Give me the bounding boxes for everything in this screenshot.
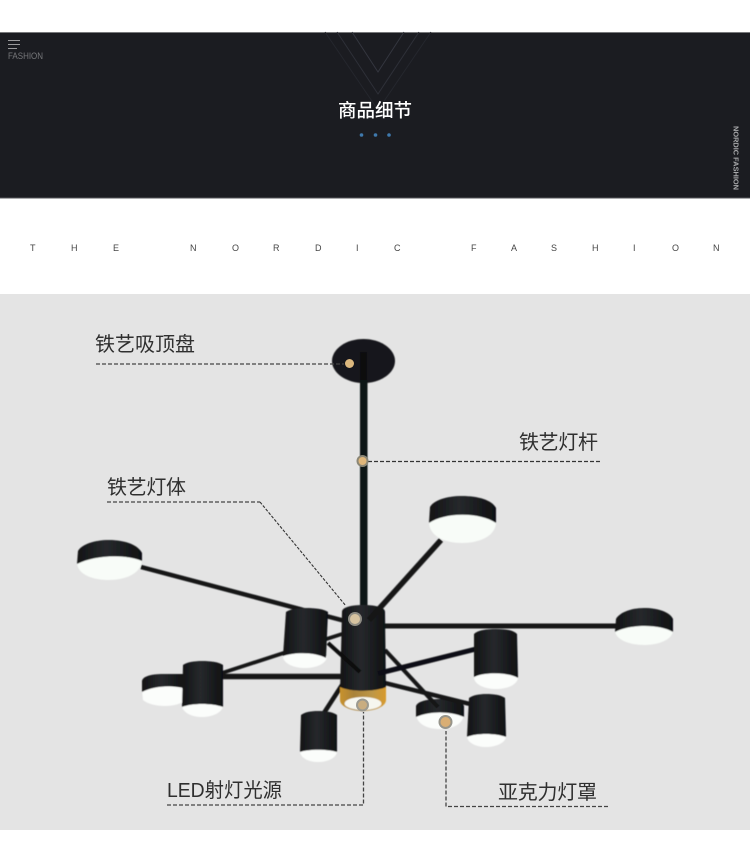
icon: cylinder lamp right lower: [467, 694, 506, 747]
callout: LED source: LED射灯光源: [167, 779, 282, 802]
callout: iron rod: 铁艺灯杆: [519, 431, 598, 454]
callout: acrylic shade: 亚克力灯罩: [498, 781, 597, 804]
icon: lamp right rear disc: [416, 699, 464, 729]
icon: central lamp body: [328, 540, 476, 711]
icon: central rod: [360, 380, 368, 608]
panel: dark header banner: [0, 32, 750, 198]
callout: acrylic shade: [438, 715, 608, 806]
callout: iron body: [107, 476, 362, 626]
callout: ceiling plate: [95, 333, 354, 368]
callout: LED source: [167, 698, 369, 805]
icon: lamp upper left disc: [77, 540, 142, 580]
icon: lamp upper right disc: [429, 496, 496, 543]
heading: product details: 商品细节: [338, 100, 412, 121]
arms behind the body: [141, 567, 618, 716]
icon: lamp far left small disc: [142, 674, 185, 706]
icon: cylinder lamp bottom: [300, 711, 337, 762]
icon: cylinder lamp right upper: [474, 629, 518, 689]
chandelier illustration: [77, 339, 673, 762]
callout: iron rod: [356, 431, 600, 467]
text: vertical NORDIC FASHION: NORDIC FASHION: [732, 126, 740, 190]
callout: iron body: 铁艺灯体: [107, 476, 186, 499]
icon: ceiling plate: [332, 339, 395, 383]
icon: menu lines: [8, 40, 20, 48]
text: spaced tagline: THENORDICFASHION: [30, 243, 720, 253]
callout: ceiling plate: 铁艺吸顶盘: [95, 333, 195, 356]
text: FASHION brand label: FASHION: [8, 51, 43, 62]
icon: three blue dots: [360, 133, 391, 137]
icon: lamp far right disc: [615, 608, 673, 645]
icon: cylinder lamp left outer: [182, 661, 223, 717]
panel: grey product background: [0, 294, 750, 830]
icon: cylinder lamp left inner: [283, 608, 328, 668]
